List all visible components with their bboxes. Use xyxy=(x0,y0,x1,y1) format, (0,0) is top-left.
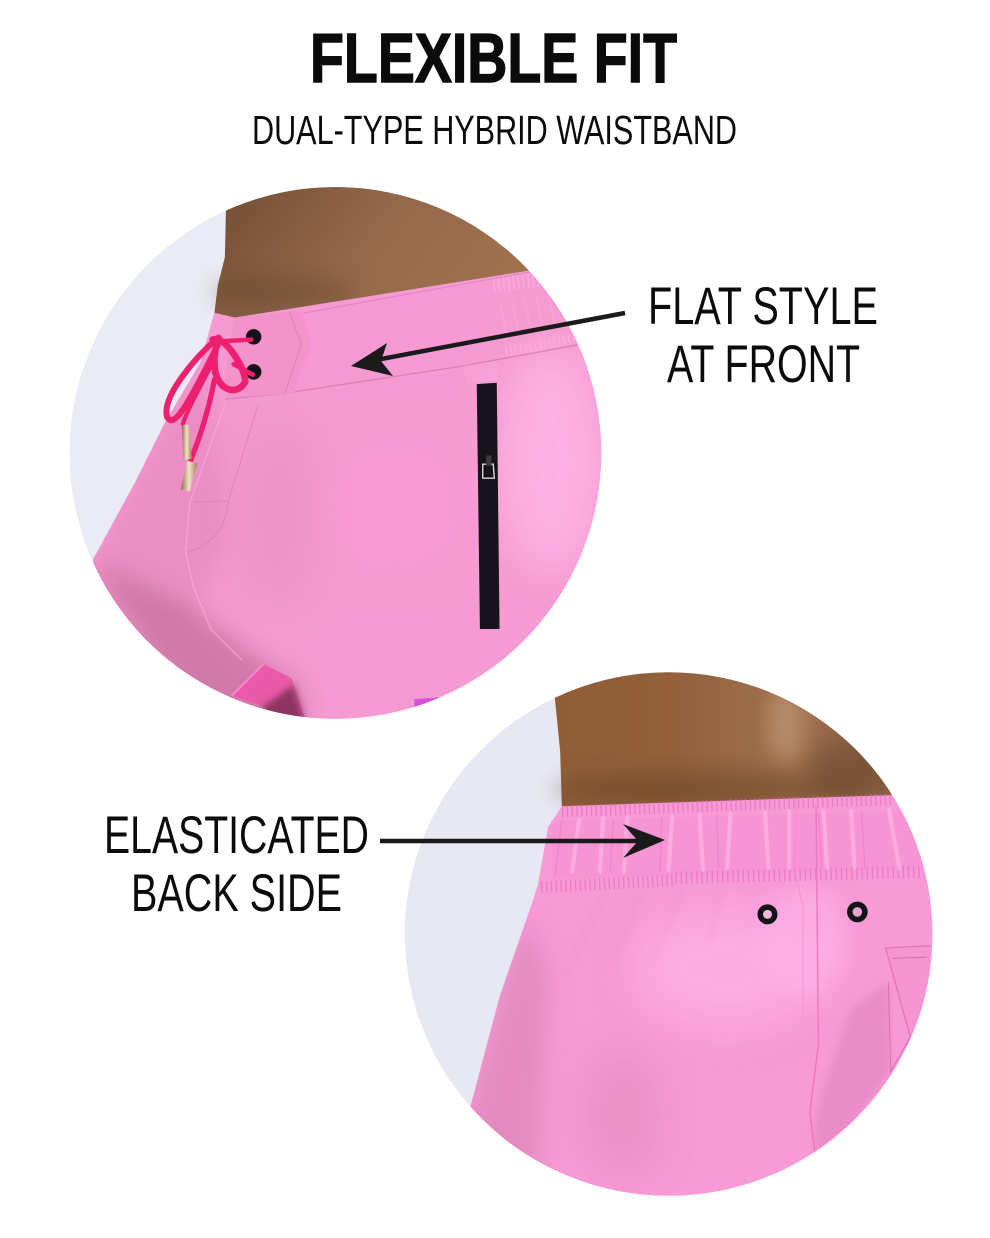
label: elasticated back side: BACK SIDE xyxy=(131,864,342,923)
zipper xyxy=(477,383,500,629)
waistband tab xyxy=(235,317,293,397)
panel: front waistband photo circle xyxy=(60,180,621,730)
waistband gathers xyxy=(551,812,924,870)
leg shadow xyxy=(232,664,306,720)
arrow: flat style at front xyxy=(351,313,625,376)
waistband gathers xyxy=(493,278,558,285)
panel: back waistband photo circle xyxy=(400,665,951,1205)
centre back seam xyxy=(794,798,803,1013)
label: elasticated back side: ELASTICATED xyxy=(104,806,369,865)
waistband seam xyxy=(225,345,577,399)
fly seam xyxy=(186,405,242,661)
label: elasticated back side xyxy=(104,806,369,923)
arrow: elasticated back side xyxy=(380,824,665,858)
eyelets xyxy=(760,907,775,922)
back pocket flap xyxy=(911,944,932,1036)
cord tips xyxy=(182,425,192,460)
label: flat style at front: AT FRONT xyxy=(667,335,860,394)
cord xyxy=(166,338,253,461)
eyelets xyxy=(246,329,261,345)
title: FLEXIBLE FIT xyxy=(310,19,677,97)
label: flat style at front: FLAT STYLE xyxy=(648,277,878,336)
logo print xyxy=(414,697,440,707)
subtitle: DUAL-TYPE HYBRID WAISTBAND xyxy=(252,107,737,153)
label: flat style at front xyxy=(648,277,878,394)
